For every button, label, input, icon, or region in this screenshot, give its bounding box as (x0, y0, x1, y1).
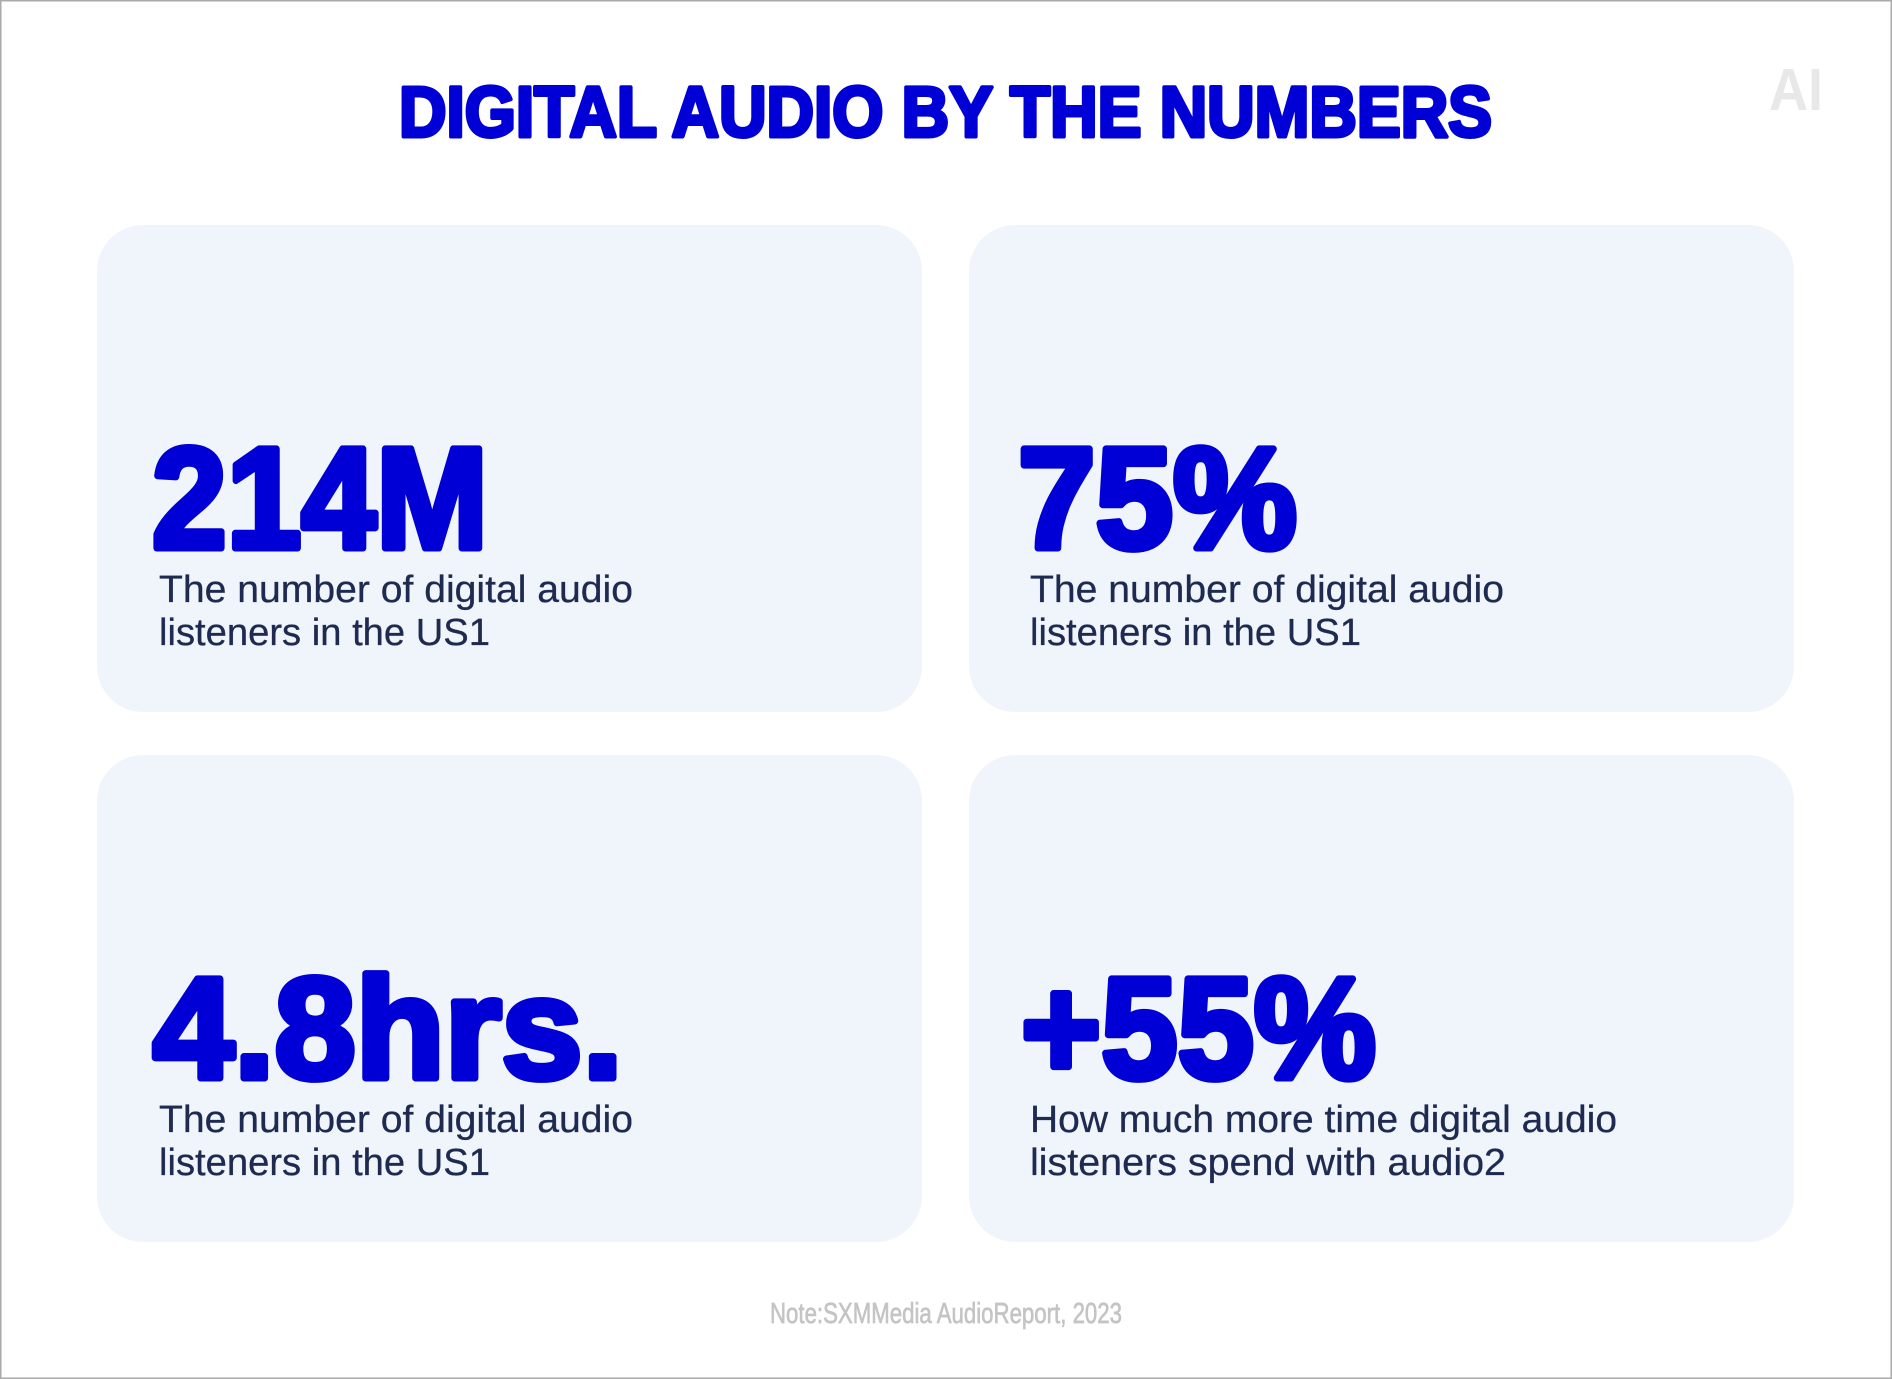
description: The number of digital audio (1030, 569, 1504, 611)
description: listeners spend with audio2 (1030, 1142, 1506, 1184)
card background (969, 225, 1794, 712)
stat: 214M: 214M (152, 418, 488, 579)
stat: 75%: 75% (1018, 418, 1297, 579)
panel: 214M (97, 225, 922, 712)
source note: Note:SXMMedia AudioReport, 2023 (770, 1298, 1122, 1330)
logo: AI: AI (1769, 57, 1823, 123)
description: The number of digital audio (159, 1099, 633, 1141)
panel: 75% (969, 225, 1794, 712)
stat: +55%: +55% (1021, 948, 1376, 1109)
card background (97, 755, 922, 1242)
panel: 4.8hrs. (97, 755, 922, 1242)
description: listeners in the US1 (159, 612, 490, 654)
panel: +55% (969, 755, 1794, 1242)
card background (969, 755, 1794, 1242)
description: listeners in the US1 (159, 1142, 490, 1184)
card background (97, 225, 922, 712)
description: listeners in the US1 (1030, 612, 1361, 654)
description: The number of digital audio (159, 569, 633, 611)
description: How much more time digital audio (1030, 1099, 1617, 1141)
title: DIGITAL AUDIO BY THE NUMBERS (399, 74, 1492, 152)
stat: 4.8hrs.: 4.8hrs. (153, 948, 623, 1109)
